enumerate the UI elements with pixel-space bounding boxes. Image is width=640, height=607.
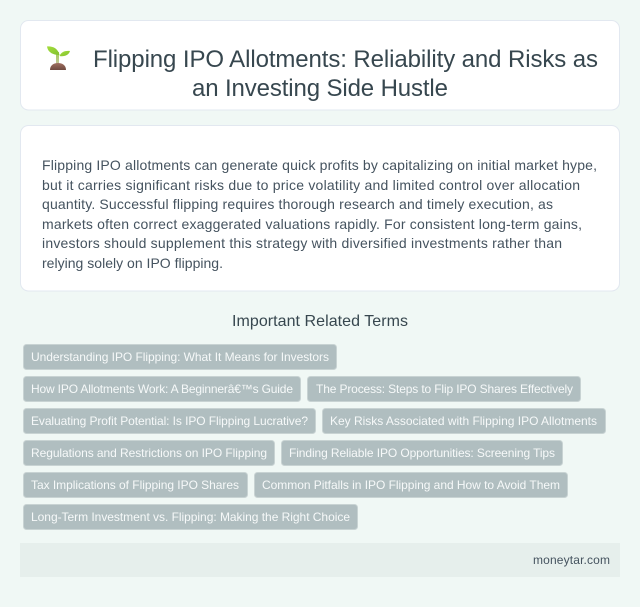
- tag: tax: [24, 472, 248, 498]
- tag: pitfalls: Common Pitfalls in IPO Flipping and How to Avoid Them: [262, 478, 560, 492]
- title: [93, 46, 598, 102]
- summary text: [42, 157, 597, 271]
- summary card: [20, 126, 620, 291]
- tag: process: [308, 376, 580, 402]
- footer bar: [20, 543, 620, 577]
- tag: allotments: How IPO Allotments Work: A Beginnerâ€™s Guide: [31, 382, 293, 396]
- tag: opportunities: [282, 440, 562, 466]
- tag: regulations: Regulations and Restrictions on IPO Flipping: [31, 446, 267, 460]
- summary text: relying solely on IPO flipping.: [42, 255, 223, 271]
- tag: regulations: [24, 440, 274, 466]
- summary text: investors should supplement this strategy with diversified investments rather than: [42, 235, 562, 251]
- title: an Investing Side Hustle: [192, 75, 448, 102]
- tag: risks: [322, 408, 606, 434]
- icon: seedling: [47, 46, 70, 70]
- summary text: markets often correct exaggerated valuations rapidly. For consistent long-term gains,: [42, 216, 582, 232]
- tag: long-term: [24, 504, 358, 530]
- tag: pitfalls: [254, 472, 568, 498]
- summary text: quantity. Successful flipping requires thorough research and timely execution, as: [42, 196, 553, 212]
- tag: opportunities: Finding Reliable IPO Opportunities: Screening Tips: [289, 446, 555, 460]
- tag: risks: Key Risks Associated with Flipping IPO Allotments: [330, 414, 597, 428]
- header card: [20, 20, 620, 110]
- tag: understanding: Understanding IPO Flipping: What It Means for Investors: [31, 350, 329, 364]
- tag: profit: Evaluating Profit Potential: Is IPO Flipping Lucrative?: [31, 414, 308, 428]
- related terms heading: Important Related Terms: [232, 313, 408, 330]
- summary text: Flipping IPO allotments can generate quick profits by capitalizing on initial market hype,: [42, 157, 597, 173]
- tag: allotments: [24, 376, 300, 402]
- tag: profit: [24, 408, 316, 434]
- tag: tax: Tax Implications of Flipping IPO Shares: [31, 478, 239, 492]
- tag: process: The Process: Steps to Flip IPO Shares Effectively: [316, 382, 573, 396]
- tag: understanding: [24, 344, 336, 370]
- summary text: but it carries significant risks due to price volatility and limited control over allocation: [42, 177, 580, 193]
- title: Flipping IPO Allotments: Reliability and Risks as: [93, 46, 598, 73]
- related terms tags: [24, 344, 606, 530]
- tag: long-term: Long-Term Investment vs. Flipping: Making the Right Choice: [31, 510, 350, 524]
- footer source: moneytar.com: [533, 553, 610, 567]
